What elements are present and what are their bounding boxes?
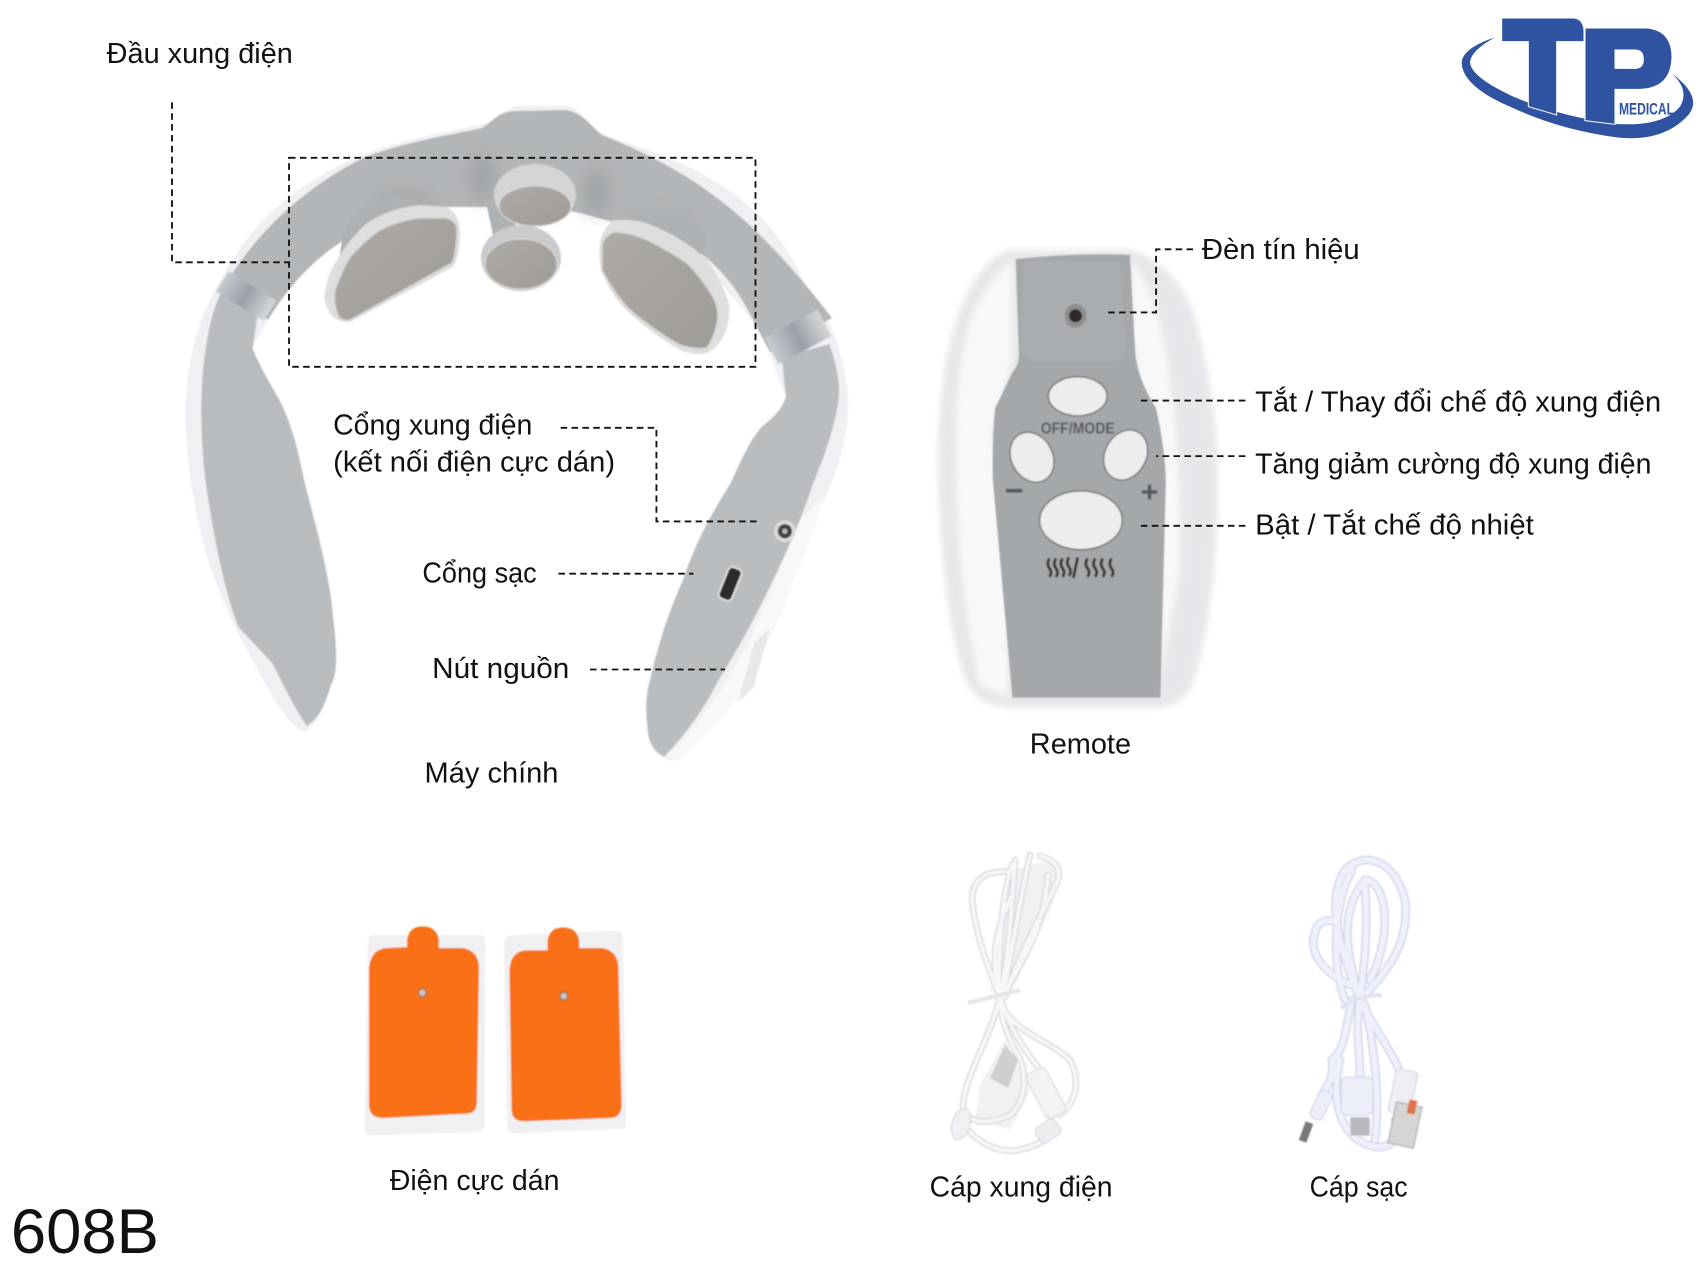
right snap (560, 992, 568, 1000)
button: plus (1095, 422, 1156, 488)
signal LED (1065, 304, 1086, 328)
label: Đèn tín hiệu: Đèn tín hiệu (1202, 233, 1360, 265)
remote body (938, 250, 1218, 708)
label: Nút nguồn: Nút nguồn (432, 652, 569, 684)
label: Tăng giảm cường độ xung điện: Tăng giảm cường độ xung điện (1255, 448, 1651, 480)
right backing (504, 931, 626, 1133)
logo swoosh (1462, 37, 1693, 138)
lower round pad (481, 225, 561, 291)
button: heat (1040, 491, 1122, 550)
left snap (418, 989, 426, 997)
label: Điện cực dán: Điện cực dán (390, 1164, 560, 1196)
left backing (365, 935, 486, 1135)
remote control (938, 250, 1218, 708)
leader: Cổng xung điện (561, 428, 757, 521)
leader: Tăng giảm (1156, 455, 1245, 457)
button: minus (1001, 424, 1063, 490)
grey connector ribs (990, 1045, 1018, 1088)
right pad (599, 220, 729, 354)
pulse cable (948, 855, 1076, 1151)
charging port (717, 566, 743, 602)
side control strip (666, 495, 824, 759)
left arm grey panel (201, 291, 336, 726)
dashed box: pulse heads (289, 158, 755, 367)
pad stems (340, 195, 706, 255)
top round pad (494, 164, 576, 226)
charging cable (1299, 860, 1422, 1148)
label: Cổng xung điện: Cổng xung điện (333, 408, 532, 440)
minus sign (1006, 489, 1022, 493)
band shading (371, 154, 694, 230)
heat symbols (1048, 557, 1113, 578)
model number: 608B (11, 1197, 159, 1267)
leader: Đầu xung điện (172, 102, 288, 262)
power button (738, 629, 770, 702)
label: Cổng sạc: Cổng sạc (422, 556, 537, 588)
plus sign (1142, 484, 1157, 500)
label: Bật / Tắt chế độ nhiệt: Bật / Tắt chế độ nhiệt (1255, 509, 1534, 541)
leader: Bật / Tắt (1138, 525, 1245, 527)
cable shading (975, 860, 1058, 1130)
MEDICAL wordmark: MEDICAL (1619, 100, 1674, 119)
logo: TP Medical (1462, 18, 1693, 138)
label: Máy chính: Máy chính (425, 757, 558, 789)
button: OFF/MODE (1048, 377, 1107, 416)
label: Cáp sạc: Cáp sạc (1310, 1170, 1408, 1202)
remote grey panel (993, 254, 1166, 698)
leader: Tắt / Thay đổi (1138, 400, 1245, 402)
top band grey (225, 110, 832, 352)
leader: Đèn tín hiệu (1105, 249, 1193, 312)
label: Đầu xung điện: Đầu xung điện (107, 37, 293, 69)
remote side highlights (955, 261, 1181, 697)
main device: neck massager (186, 106, 848, 761)
right hinge (764, 310, 832, 364)
label: Remote: Remote (1030, 727, 1131, 759)
OFF/MODE caption: OFF/MODE (1041, 420, 1115, 437)
device body outline (186, 106, 848, 761)
upper inset (1021, 261, 1126, 361)
right orange pad (509, 927, 622, 1121)
leader: Cổng sạc (558, 573, 693, 575)
left hinge (216, 271, 276, 321)
leader: Nút nguồn (590, 668, 725, 670)
letter P (1585, 28, 1672, 124)
letter T (1502, 18, 1584, 115)
electrode pads (365, 926, 626, 1135)
left pad (324, 205, 460, 322)
left orange pad (369, 926, 479, 1118)
label: Cáp xung điện: Cáp xung điện (930, 1170, 1113, 1202)
right arm grey panel (646, 344, 839, 757)
pulse port (774, 520, 796, 542)
label: Tắt / Thay đổi chế độ xung điện: Tắt / Thay đổi chế độ xung điện (1255, 385, 1661, 417)
label: kết nối điện cực dán: (kết nối điện cực dán) (333, 445, 615, 477)
